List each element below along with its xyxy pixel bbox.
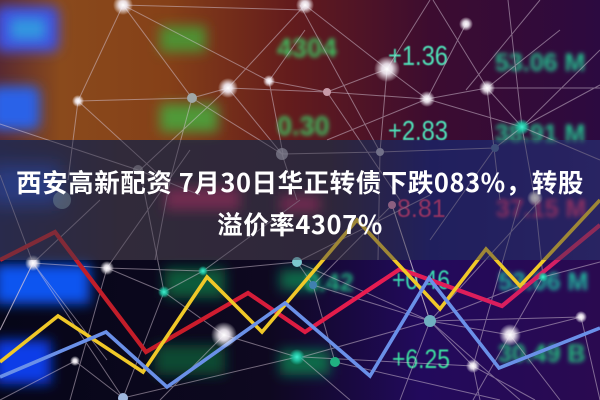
market numbers: 38.91 M	[495, 120, 585, 148]
market numbers: 0.42	[305, 269, 354, 297]
blurred colour blocks	[0, 6, 330, 384]
title: 溢价率4307%	[217, 205, 383, 242]
market numbers: 4304	[277, 33, 337, 63]
red line	[0, 225, 600, 352]
blue line	[0, 278, 600, 387]
market numbers: 37.15 M	[496, 195, 586, 223]
market numbers: 53.06 M	[498, 268, 588, 296]
market numbers: +2.83	[388, 115, 448, 146]
yellow line	[0, 200, 600, 372]
title	[16, 163, 584, 242]
market numbers: +1.36	[388, 40, 448, 71]
market numbers: +6.25	[392, 344, 450, 374]
translucent title band	[0, 140, 600, 260]
market numbers: 30.49 B	[498, 340, 586, 368]
market numbers: 53.06 M	[495, 49, 585, 77]
market numbers: 8.81	[397, 195, 446, 223]
market numbers	[277, 33, 588, 374]
title: 西安高新配资 7月30日华正转债下跌083%，转股	[16, 163, 584, 200]
market numbers: +0.46	[392, 265, 450, 295]
market numbers: 0.30	[277, 111, 330, 141]
line chart	[0, 200, 600, 387]
